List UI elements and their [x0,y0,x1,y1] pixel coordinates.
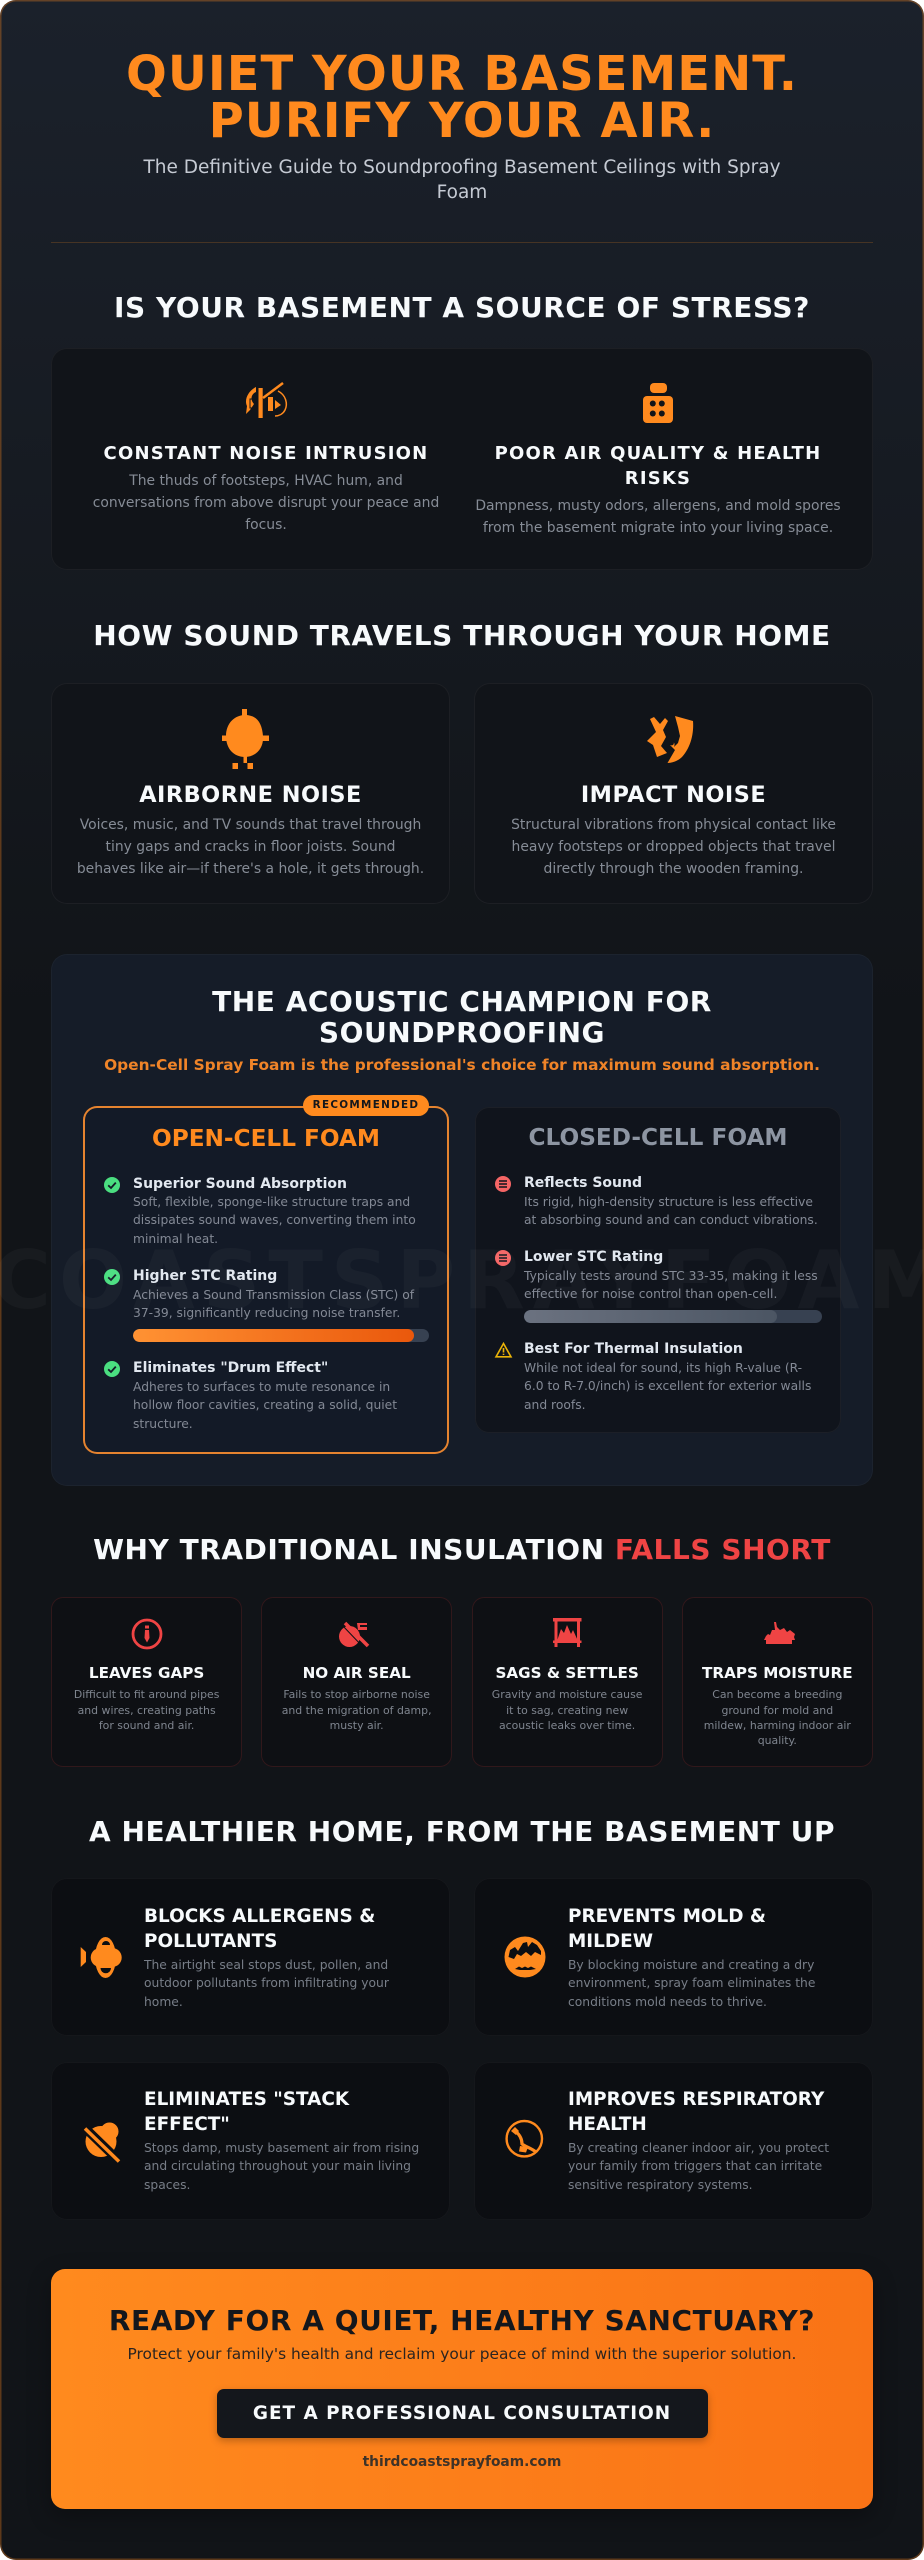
icon: muted noise [246,382,288,418]
card: sags and settles [472,1597,663,1767]
text: airborne noise: behaves like air—if there's a hole, it gets through. [77,861,424,877]
icon: airborne noise [222,709,269,769]
item: best for thermal insulation: Best For Thermal Insulation [524,1341,743,1357]
item: superior sound absorption: Soft, flexible, sponge-like structure traps and [133,1195,410,1209]
card text: poor air quality [475,442,841,536]
subtitle: The Definitive Guide to Soundproofing Basement Ceilings with Spray [143,156,781,178]
text: impact noise: heavy footsteps or dropped objects that travel [512,839,835,855]
icon: no seal [339,1622,370,1648]
button: consultation [216,2389,708,2438]
card text: poor air quality: POOR AIR QUALITY & HEALTH [495,442,821,464]
text: blocks allergens: BLOCKS ALLERGENS & [144,1906,375,1926]
heading: healthier home: A HEALTHIER HOME, FROM THE BASEMENT UP [89,1815,835,1848]
heading: falls short: WHY TRADITIONAL INSULATION FALLS SHORT [93,1533,831,1566]
text: website: thirdcoastsprayfoam.com [363,2454,561,2470]
panel: airborne noise [51,683,450,904]
text: no air seal: and the migration of damp, [282,1704,432,1717]
text: prevents mold: environment, spray foam eliminates the [568,1976,815,1990]
icon: air canister [643,383,673,423]
heading: ready for a sanctuary: READY FOR A QUIET, HEALTHY SANCTUARY? [109,2304,815,2337]
text: improves respiratory health: HEALTH [568,2114,647,2134]
card text: poor air quality: from the basement migrate into your living space. [483,520,833,536]
heading: no air seal: NO AIR SEAL [303,1664,411,1682]
card: eliminates stack effect [51,2062,450,2220]
icon: allergen shield [80,1937,122,1978]
text: airborne noise: tiny gaps and cracks in floor joists. Sound [106,839,395,855]
icon: moisture [764,1622,795,1644]
heading: acoustic champion: SOUNDPROOFING [319,1016,605,1048]
text: no air seal: musty air. [330,1719,384,1732]
text: prevents mold: conditions mold needs to thrive. [568,1995,767,2009]
card text: poor air quality: Dampness, musty odors, allergens, and mold spores [475,498,841,514]
text: traps moisture [704,1688,851,1747]
text: no air seal [282,1688,432,1732]
card: closed-cell foam [475,1107,841,1433]
item: higher stc rating [133,1268,414,1320]
item: reflects sound: Reflects Sound [524,1175,642,1191]
icon: check [104,1177,120,1193]
text: sags and settles: Gravity and moisture cause [492,1688,642,1701]
text: eliminates stack effect: Stops damp, musty basement air from rising [144,2141,419,2155]
heading: closed-cell foam: CLOSED-CELL FOAM [529,1124,787,1151]
text: blocks allergens: outdoor pollutants from infiltrating your [144,1976,389,1990]
subheading: open-cell choice: Open-Cell Spray Foam is the professional's choice for maximum sound absorption. [104,1056,820,1074]
text: eliminates stack effect: EFFECT" [144,2114,230,2134]
icon: minus [495,1176,511,1192]
card text: constant noise intrusion [93,442,439,533]
heading: acoustic champion: THE ACOUSTIC CHAMPION FOR [212,984,712,1018]
subtitle [143,156,781,202]
heading: airborne noise: AIRBORNE NOISE [139,782,362,808]
card: no air seal [261,1597,452,1767]
text: traps moisture: mildew, harming indoor air [704,1719,851,1732]
text: improves respiratory health: By creating cleaner indoor air, you protect [568,2141,829,2155]
panel: impact noise [474,683,873,904]
item: lower stc rating: Typically tests around STC 33-35, making it less [524,1269,818,1283]
text: impact noise: directly through the wooden framing. [544,861,803,877]
text: leaves gaps [74,1688,219,1732]
item: superior sound absorption: minimal heat. [133,1232,218,1246]
text: blocks allergens: home. [144,1995,183,2009]
title [126,46,798,149]
bar: closed-cell stc [524,1310,822,1322]
text: eliminates stack effect [144,2088,419,2192]
heading: acoustic champion [212,984,712,1048]
text: prevents mold: MILDEW [568,1930,653,1952]
text: eliminates stack effect: ELIMINATES "STACK [144,2088,349,2110]
card: prevents mold [474,1878,873,2036]
text: improves respiratory health: your family from triggers that can irritate [568,2159,822,2173]
text: airborne noise [77,817,424,877]
text: leaves gaps: Difficult to fit around pipes [74,1688,219,1701]
title: QUIET YOUR BASEMENT. [126,46,798,102]
text: impact noise [511,817,836,877]
bar: open-cell stc [133,1329,429,1342]
panel: acoustic champion [51,954,873,1486]
card: open-cell foam [83,1106,449,1454]
text: blocks allergens: The airtight seal stops dust, pollen, and [144,1958,388,1972]
card text: constant noise intrusion: focus. [245,517,287,533]
icon: sagging [553,1618,582,1647]
item: lower stc rating: effective for noise control than open-cell. [524,1287,777,1301]
item: eliminates drum effect: structure. [133,1417,193,1431]
item: eliminates drum effect: hollow floor cavities, creating a solid, quiet [133,1398,397,1412]
subtitle: Foam [437,182,487,202]
text: traps moisture: ground for mold and [722,1704,833,1717]
text: improves respiratory health: IMPROVES RESPIRATORY [568,2088,824,2110]
card text: constant noise intrusion: The thuds of footsteps, HVAC hum, and [129,473,403,489]
item: lower stc rating [524,1249,818,1301]
text: prevents mold [568,1906,815,2009]
text: cta subtitle: Protect your family's health and reclaim your peace of mind with the superior solution. [128,2345,796,2363]
text: traps moisture: Can become a breeding [712,1688,842,1701]
heading: leaves gaps: LEAVES GAPS [89,1664,204,1682]
item: eliminates drum effect [133,1360,397,1431]
card text: constant noise intrusion: conversations from above disrupt your peace and [93,495,439,511]
icon: warning [494,1342,512,1358]
icon: check [104,1269,120,1285]
text: prevents mold: By blocking moisture and creating a dry [568,1958,814,1972]
text: sags and settles [492,1688,642,1732]
item: superior sound absorption [133,1176,416,1246]
icon: minus [495,1250,511,1266]
heading: how sound travels: HOW SOUND TRAVELS THROUGH YOUR HOME [93,619,831,652]
card: traps moisture [682,1597,873,1767]
item: reflects sound [524,1175,818,1227]
item: reflects sound: Its rigid, high-density structure is less effective [524,1195,813,1209]
item: lower stc rating: Lower STC Rating [524,1249,663,1265]
icon: gap [132,1618,162,1650]
text: improves respiratory health: sensitive respiratory systems. [568,2178,753,2192]
card: improves respiratory health [474,2062,873,2220]
item: best for thermal insulation: While not ideal for sound, its high R-value (R- [524,1361,802,1375]
badge: recommended [303,1095,429,1116]
icon: stack effect [84,2122,120,2163]
item: higher stc rating: Higher STC Rating [133,1268,277,1284]
text: leaves gaps: and wires, creating paths [78,1704,216,1717]
item: superior sound absorption: Superior Sound Absorption [133,1176,347,1192]
text: eliminates stack effect: and circulating throughout your main living [144,2159,411,2173]
title: PURIFY YOUR AIR. [209,93,715,149]
item: higher stc rating: Achieves a Sound Transmission Class (STC) of [133,1288,414,1302]
card text: poor air quality: RISKS [625,468,691,488]
icon: mold [504,1936,546,1978]
item: eliminates drum effect: Eliminates "Drum Effect" [133,1360,328,1376]
item: best for thermal insulation [524,1341,811,1412]
icon: respiratory [505,2120,544,2158]
button: consultation: GET A PROFESSIONAL CONSULTATION [253,2403,671,2424]
card: leaves gaps [51,1597,242,1767]
item: higher stc rating: 37-39, significantly reducing noise transfer. [133,1306,400,1320]
icon: check [104,1361,120,1377]
text: leaves gaps: for sound and air. [99,1719,194,1732]
panel: problems [51,348,873,570]
card: blocks allergens [51,1878,450,2036]
icon: impact noise [647,716,694,763]
text: blocks allergens: POLLUTANTS [144,1930,277,1952]
heading: source of stress: IS YOUR BASEMENT A SOURCE OF STRESS? [114,291,810,324]
heading: traps moisture: TRAPS MOISTURE [702,1664,853,1682]
text: impact noise: Structural vibrations from physical contact like [511,817,836,833]
heading: sags and settles: SAGS & SETTLES [495,1664,639,1682]
item: eliminates drum effect: Adheres to surfaces to mute resonance in [133,1380,390,1394]
text: sags and settles: it to sag, creating new [506,1704,628,1717]
heading: open-cell foam: OPEN-CELL FOAM [152,1125,380,1152]
item: superior sound absorption: dissipates sound waves, converting them into [133,1213,416,1227]
item: best for thermal insulation: 6.0 to R-7.0/inch) is excellent for exterior walls [524,1379,811,1393]
badge: recommended: RECOMMENDED [313,1099,419,1111]
item: best for thermal insulation: and roofs. [524,1398,586,1412]
text: prevents mold: PREVENTS MOLD & [568,1906,766,1926]
text: no air seal: Fails to stop airborne noise [283,1688,430,1701]
text: sags and settles: acoustic leaks over time. [499,1719,635,1732]
card text: constant noise intrusion: CONSTANT NOISE INTRUSION [104,442,428,464]
text: blocks allergens [144,1906,389,2009]
heading: impact noise: IMPACT NOISE [581,782,766,808]
panel: call to action [51,2269,873,2509]
text: airborne noise: Voices, music, and TV sounds that travel through [80,817,421,833]
text: improves respiratory health [568,2088,829,2192]
text: eliminates stack effect: spaces. [144,2178,190,2192]
text: traps moisture: quality. [758,1734,797,1747]
item: reflects sound: at absorbing sound and can conduct vibrations. [524,1213,818,1227]
